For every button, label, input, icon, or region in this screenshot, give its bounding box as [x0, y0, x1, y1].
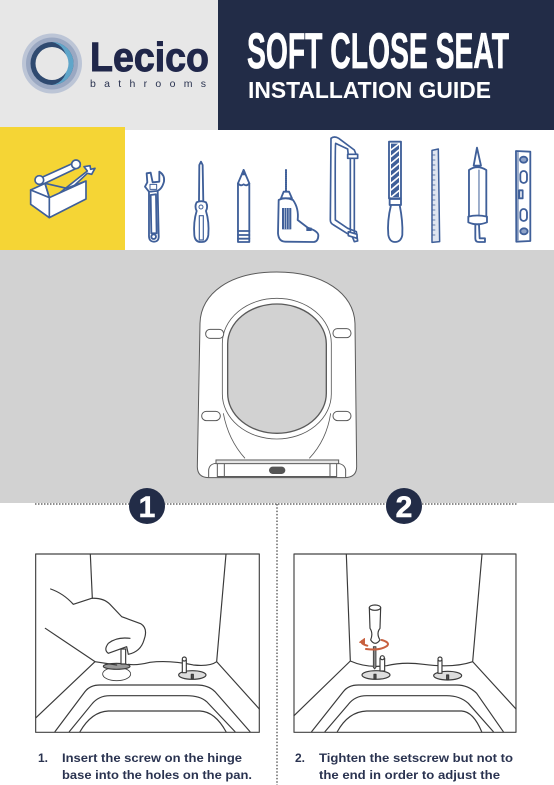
step 1 badge: 1 [139, 491, 155, 524]
step 1 text: base into the holes on the pan. [62, 768, 252, 782]
subtitle: INSTALLATION GUIDE [248, 77, 491, 103]
step 1 badge [129, 488, 165, 524]
icon: screwdriver [373, 647, 376, 669]
step 2 badge: 2 [396, 491, 412, 524]
tank and pan outline [36, 554, 259, 718]
icon: toilet seat [197, 272, 357, 478]
panel: toolbox tile [0, 127, 125, 250]
header: logo panel [0, 0, 218, 130]
right hinge [179, 657, 206, 679]
icon: hacksaw [330, 137, 358, 242]
step 1 text [38, 751, 252, 782]
icon: spirit level [516, 151, 530, 242]
icon: caulk gun [468, 148, 487, 242]
icon: file [388, 142, 402, 242]
logo tagline: bathrooms [90, 78, 206, 90]
panel: tools strip [145, 137, 530, 242]
icon: pencil [238, 170, 249, 242]
icon: rotation arrow [362, 640, 388, 650]
step 1 text: Insert the screw on the hinge [62, 751, 242, 765]
step 2 text: Tighten the setscrew but not to [319, 751, 513, 765]
step 2 text: the end in order to adjust the [319, 768, 500, 782]
icon: toolbox [31, 160, 95, 218]
left hinge [103, 667, 131, 681]
logo wordmark: Lecico [90, 34, 209, 80]
seat rim curves [312, 685, 503, 732]
icon: screwdriver [194, 162, 209, 242]
step 2 text: 2. [295, 751, 305, 765]
seat rim curves [55, 685, 250, 732]
right hinge [434, 657, 462, 680]
tank and pan outline [294, 554, 516, 716]
icon: ruler [432, 149, 440, 242]
hand [45, 589, 146, 665]
step 1 text: 1. [38, 751, 48, 765]
icon: logo ring [22, 34, 82, 94]
panel: toilet seat illustration [0, 250, 554, 503]
icon: drill [278, 170, 318, 242]
step 2 badge [386, 488, 422, 524]
panel: step 1 illustration [36, 554, 259, 732]
step 2 text [295, 751, 513, 782]
panel: step 2 illustration [294, 554, 516, 732]
header: title panel [218, 0, 554, 130]
dotted section dividers [35, 503, 517, 505]
left hinge [362, 656, 390, 679]
icon: adjustable wrench [145, 172, 164, 242]
